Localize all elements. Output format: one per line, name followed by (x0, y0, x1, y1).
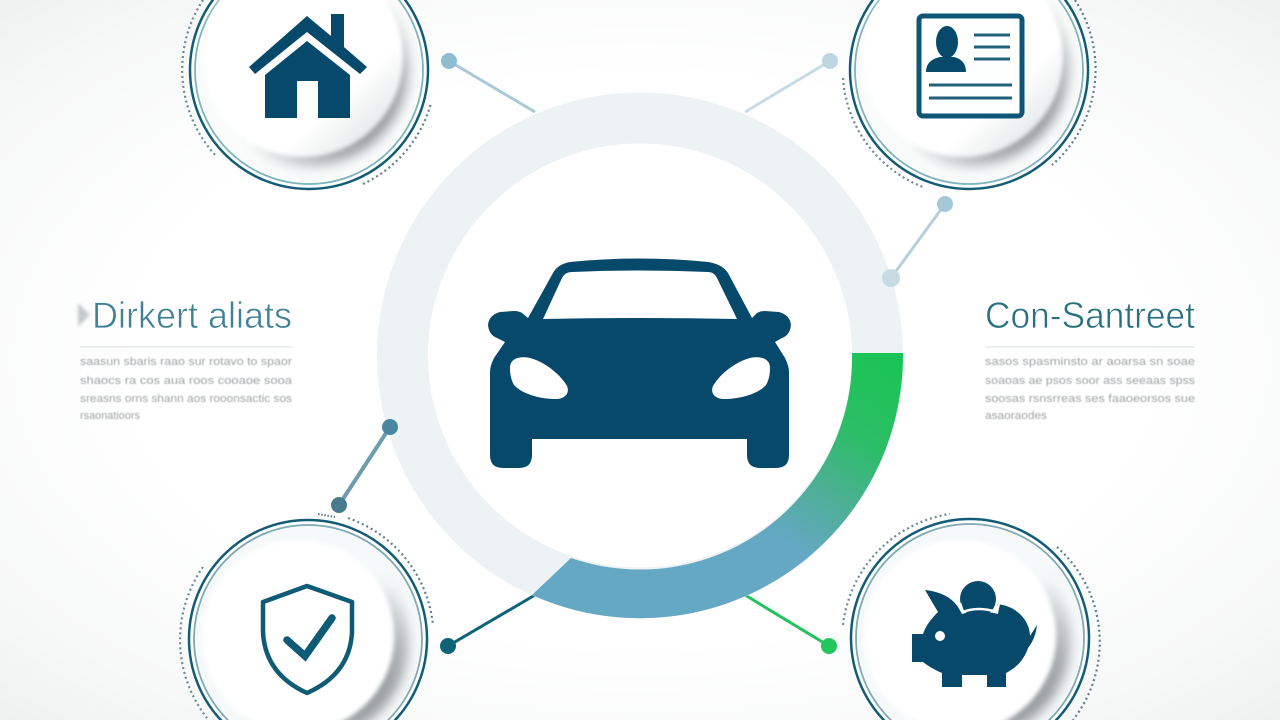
connector: lower left (331, 419, 398, 513)
text block: right (985, 295, 1196, 422)
feature circle: shield (180, 514, 433, 720)
right body text (985, 356, 1196, 422)
feature circle: ID card (843, 0, 1096, 189)
connector: bottom left (440, 595, 535, 654)
right body text: soaoas ae psos soor ass seeaas spss (985, 375, 1196, 387)
left body text: saasun sbaris raao sur rotavo to spaor (80, 356, 292, 368)
right heading: Con-Santreet (985, 295, 1196, 336)
right body text: sasos spasminsto ar aoarsa sn soae (985, 356, 1195, 368)
connector: top left (441, 53, 535, 112)
icon: shield with check (263, 586, 352, 693)
progress arc (532, 353, 903, 618)
left body text: sreasns orns shann aos rooonsactic sos (80, 393, 293, 405)
text block: left (78, 295, 293, 422)
left marker (78, 303, 90, 327)
left body text: shaocs ra cos aua roos cooaoe sooa (80, 375, 293, 387)
left body text (80, 356, 293, 422)
icon: ID card (919, 16, 1022, 116)
connector: bottom right (745, 595, 837, 654)
left body text: rsaonatioors (80, 410, 140, 422)
left heading: Dirkert aliats (92, 295, 292, 336)
right body text: soosas rsnsrreas ses faaoeorsos sue (985, 393, 1195, 405)
icon: car (488, 258, 791, 468)
feature circle: home (182, 0, 431, 189)
feature circle: piggy bank (843, 514, 1100, 720)
icon: house (249, 14, 367, 118)
icon: piggy bank (912, 581, 1037, 687)
connector: top right (745, 53, 838, 112)
central ring (402, 118, 903, 618)
connector: right (882, 196, 953, 287)
right body text: asaoraodes (985, 410, 1048, 422)
